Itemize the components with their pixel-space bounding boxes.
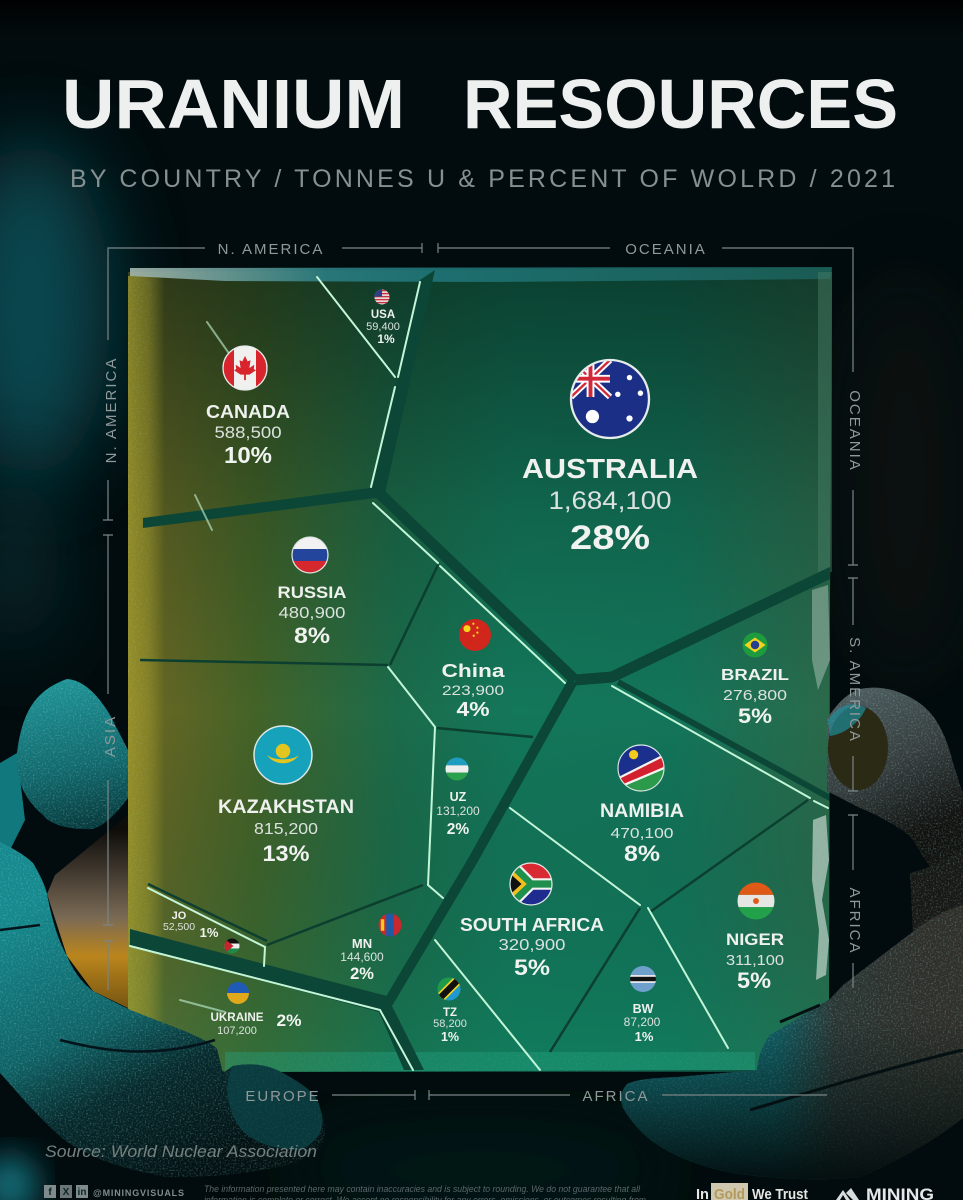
flag: Tanzania (438, 978, 460, 1000)
name: USA (371, 309, 395, 321)
percent: 8% (294, 623, 330, 648)
tonnes: 52,500 (163, 921, 195, 933)
flag: Australia (571, 360, 649, 438)
name: NIGER (726, 931, 784, 949)
label: S. America side: S. AMERICA (846, 637, 863, 743)
disclaimer: The information presented here may contain inaccuracies and is subject to rounding. We do not guarantee that all (204, 1184, 641, 1194)
name: China (442, 661, 506, 681)
percent: 2% (447, 821, 469, 838)
tonnes: 480,900 (278, 605, 346, 622)
name: SOUTH AFRICA (460, 915, 604, 935)
Tanzania (433, 978, 467, 1044)
name: TZ (443, 1007, 457, 1019)
label: Oceania side: OCEANIA (846, 390, 863, 472)
Mongolia (340, 914, 402, 983)
flag: China (459, 619, 491, 651)
flag: Uzbekistan (446, 758, 468, 780)
name: BW (633, 1002, 654, 1016)
flag: South Africa (510, 863, 552, 905)
percent: 1% (441, 1030, 459, 1044)
icons: social (44, 1185, 88, 1198)
Canada (206, 346, 290, 468)
percent: 5% (738, 705, 772, 728)
name: BRAZIL (721, 667, 789, 684)
label: Africa bottom: AFRICA (582, 1088, 650, 1105)
flag: Canada (223, 346, 267, 390)
USA (366, 290, 400, 346)
label: N. America top: N. AMERICA (218, 241, 324, 258)
name: AUSTRALIA (522, 453, 698, 484)
Kazakhstan (218, 726, 354, 866)
tonnes: 144,600 (340, 950, 384, 964)
label: Africa side: AFRICA (846, 887, 863, 955)
tonnes: 311,100 (726, 952, 784, 969)
tonnes: 223,900 (442, 682, 504, 698)
Niger (726, 882, 784, 993)
Ukraine (210, 982, 302, 1037)
percent: 1% (377, 332, 395, 346)
handle: @MININGVISUALS (93, 1188, 184, 1198)
label: N. America side: N. AMERICA (103, 357, 120, 463)
percent: 13% (262, 841, 310, 866)
flag: Namibia (618, 745, 664, 791)
flag: Jordan (224, 938, 240, 954)
tonnes: 87,200 (624, 1015, 661, 1029)
crusty right edge (812, 585, 830, 980)
title: URANIUM (62, 65, 405, 143)
flag: Botswana (630, 966, 656, 992)
title: RESOURCES (463, 65, 898, 143)
uranium slab (128, 267, 832, 1072)
left thumb (17, 679, 128, 829)
flag: Kazakhstan (254, 726, 312, 784)
light fracture lines (130, 277, 828, 1070)
Uzbekistan (436, 758, 480, 838)
icons: social: f (48, 1187, 52, 1198)
title (62, 65, 898, 143)
flag: Mongolia (378, 914, 402, 936)
tonnes: 58,200 (433, 1018, 467, 1030)
Namibia (600, 745, 684, 866)
tonnes: 107,200 (217, 1025, 257, 1037)
percent: 8% (624, 841, 660, 866)
label: Asia side: ASIA (102, 715, 119, 757)
name: UKRAINE (210, 1012, 264, 1024)
brown cuff patch (47, 815, 128, 1008)
percent: 4% (456, 699, 490, 721)
left glove (0, 679, 325, 1177)
China (442, 619, 506, 721)
Russia (278, 537, 346, 648)
grooves between countries (130, 270, 832, 1070)
subtitle: BY COUNTRY / TONNES U & PERCENT OF WOLRD / 2021 (70, 165, 895, 193)
tonnes: 588,500 (214, 423, 282, 442)
name: MN (352, 936, 372, 951)
flag: Russia (292, 537, 328, 573)
percent: 1% (200, 925, 219, 940)
logo: Mining (836, 1185, 934, 1200)
label: Europe bottom: EUROPE (245, 1088, 321, 1105)
flag: Ukraine (227, 982, 249, 1004)
South Africa (460, 863, 604, 980)
source: Source: World Nuclear Association (45, 1142, 317, 1161)
percent: 5% (514, 955, 550, 980)
icons: social: X (63, 1187, 70, 1198)
right palm (621, 905, 963, 1179)
name: KAZAKHSTAN (218, 797, 354, 818)
tonnes: 59,400 (366, 321, 400, 333)
flag: Niger (738, 882, 774, 920)
name: JO (172, 910, 187, 922)
tonnes: 276,800 (723, 687, 787, 704)
percent: 10% (224, 442, 272, 468)
percent: 28% (570, 519, 650, 557)
region frame (102, 241, 863, 1105)
Brazil (721, 632, 789, 728)
Australia (522, 360, 698, 557)
tonnes: 1,684,100 (548, 487, 672, 515)
disclaimer (204, 1184, 646, 1200)
tonnes: 320,900 (498, 937, 566, 954)
Jordan (163, 910, 240, 954)
right glove (621, 688, 963, 1179)
right thumb (827, 688, 963, 867)
flag: USA (374, 290, 390, 304)
icons: social: in (78, 1187, 86, 1198)
percent: 2% (276, 1011, 302, 1030)
Botswana (624, 966, 661, 1044)
name: CANADA (206, 402, 290, 422)
name: UZ (450, 790, 467, 804)
tonnes: 815,200 (254, 821, 318, 838)
logo: In Gold We Trust (696, 1183, 808, 1200)
label: Oceania top: OCEANIA (625, 241, 707, 258)
percent: 2% (350, 965, 374, 983)
percent: 1% (635, 1029, 654, 1044)
tonnes: 131,200 (436, 804, 480, 818)
percent: 5% (737, 968, 771, 993)
tonnes: 470,100 (610, 825, 674, 842)
name: RUSSIA (278, 583, 346, 602)
flag: Brazil (742, 632, 768, 658)
social handle (44, 1185, 184, 1198)
name: NAMIBIA (600, 801, 684, 822)
